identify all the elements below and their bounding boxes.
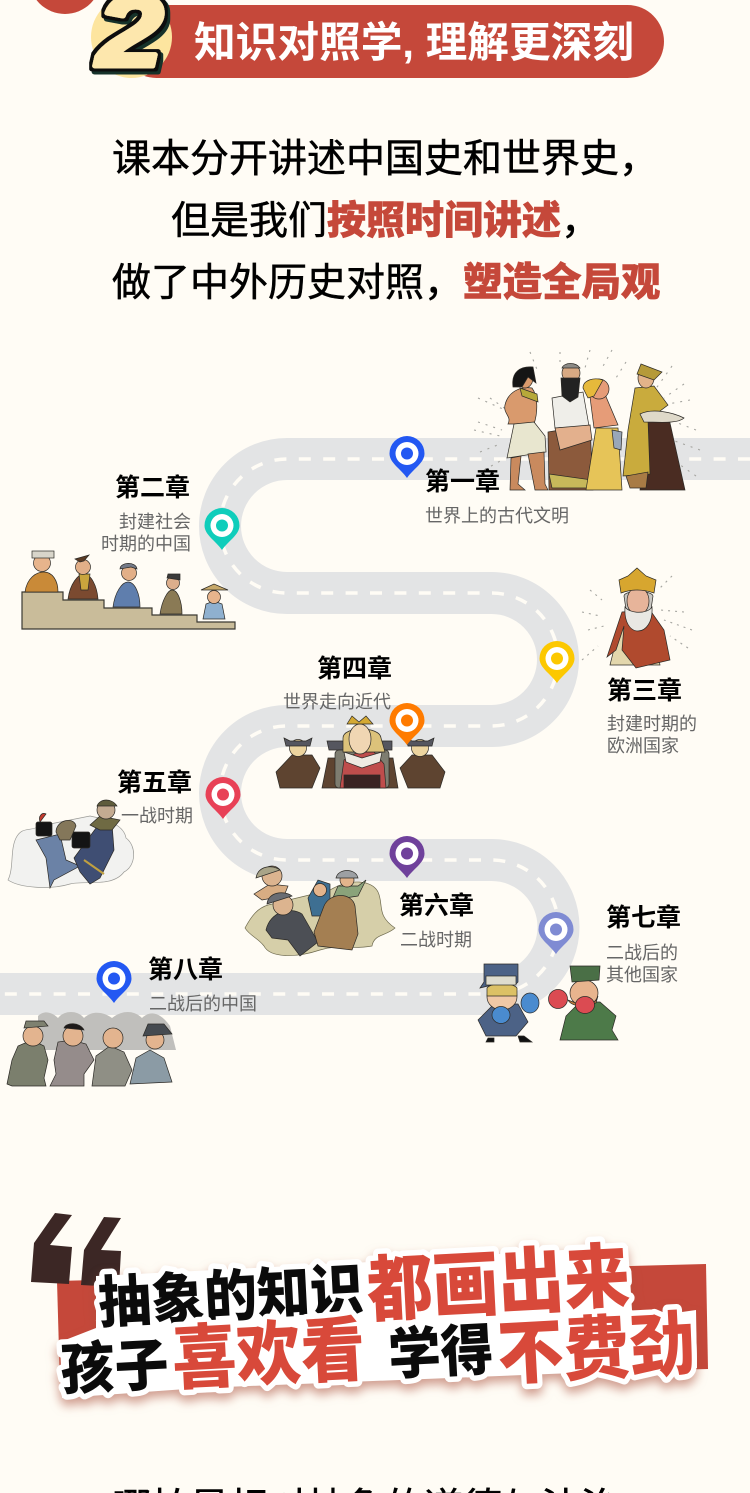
map pins (96, 436, 574, 1003)
pin chapter 5 (206, 777, 240, 819)
slogan line 1: 都画出来 (365, 1238, 632, 1332)
number badge circle (91, 0, 172, 78)
slogan line 1 (96, 1238, 632, 1346)
pin chapter 2 (204, 508, 240, 550)
chapter 2 label (101, 473, 191, 554)
official in brown (68, 555, 98, 599)
pin chapter 3 (540, 641, 574, 683)
previous section red circle (29, 0, 101, 14)
navy soldier (72, 824, 114, 884)
chapter 6 label: 二战时期 (400, 930, 472, 950)
illustration: post-war china crowd (7, 1012, 176, 1086)
brown soldier from behind (314, 896, 358, 950)
cream robe (610, 625, 660, 665)
chapter 7 label: 二战后的 (606, 943, 678, 963)
man in grey robe (130, 1024, 172, 1084)
man in taupe (50, 1024, 94, 1086)
chapter 2 label: 第二章 (115, 473, 190, 502)
chapter 6 label (399, 891, 474, 950)
chapter 7 label: 第七章 (606, 903, 681, 932)
blue soldier (308, 880, 330, 916)
chapter 6 label: 第六章 (399, 891, 474, 920)
grey officer (266, 893, 318, 956)
intro paragraph (112, 138, 661, 305)
back left soldier (322, 741, 345, 788)
uncle sam boxer (478, 964, 539, 1042)
chapter 7 label: 其他国家 (606, 965, 678, 985)
red backing panel (57, 1264, 708, 1386)
chapter 2 label: 封建社会 (119, 512, 191, 532)
chapter 3 label: 第三章 (607, 676, 682, 705)
illustration: world war two brawl (245, 866, 395, 956)
illustration: ancient civilisations group (474, 350, 700, 490)
grey crowd behind (38, 1012, 176, 1050)
scholar in blue (113, 563, 140, 607)
slogan line 2: 喜欢看 (170, 1311, 367, 1399)
chapter 5 label (117, 768, 193, 826)
illustration: cold war boxers (478, 964, 618, 1042)
pin chapter 7 (538, 912, 574, 954)
intro line 3: 做了中外历史对照，塑造全局观 (112, 261, 661, 305)
chapter 8 label: 二战后的中国 (149, 994, 257, 1014)
face and hair (624, 592, 653, 616)
title pill (120, 5, 664, 78)
road surface (0, 459, 750, 994)
chapter 4 label (283, 654, 392, 712)
burst marks (582, 576, 692, 660)
stairs (22, 592, 235, 629)
chapter 4 label: 世界走向近代 (283, 692, 391, 712)
soviet boxer (548, 966, 618, 1040)
olive soldier (90, 800, 120, 830)
slogan line 2 (58, 1294, 697, 1417)
chapter 7 label (606, 903, 681, 985)
section title: 知识对照学, 理解更深刻 (194, 19, 634, 66)
chapter 3 label (607, 676, 697, 756)
pin chapter 6 (390, 836, 424, 878)
pin chapter 1 (390, 436, 424, 478)
chapter 3 label: 欧洲国家 (607, 736, 679, 756)
chapter 1 label: 第一章 (425, 467, 500, 496)
robed figure in yellow (623, 364, 685, 490)
pin chapter 8 (96, 961, 132, 1003)
left soldier (276, 738, 320, 788)
chapter 2 label: 时期的中国 (101, 534, 191, 554)
bald man (92, 1028, 132, 1086)
egyptian figure (505, 367, 548, 490)
chapter 1 label (425, 467, 569, 526)
red cape (607, 610, 670, 668)
chapter 5 label: 第五章 (117, 768, 192, 797)
slogan line 2: 孩子 (59, 1333, 170, 1402)
slogan banner (31, 1213, 708, 1417)
back right soldier (378, 741, 398, 788)
illustration: medieval european king (582, 568, 692, 668)
section header (29, 0, 664, 88)
white dust cloud (8, 816, 134, 887)
chapter labels (101, 467, 697, 1014)
ushanka soldier (332, 870, 366, 900)
bearded figure (548, 364, 593, 490)
chapter 1 label: 世界上的古代文明 (425, 506, 569, 526)
chapter 4 label: 第四章 (317, 654, 392, 683)
emperor (25, 551, 58, 592)
illustration: world war one scuffle (8, 800, 134, 888)
white fill behind slogan (60, 1246, 697, 1398)
burst marks (474, 350, 700, 476)
chapter 8 label: 第八章 (148, 955, 223, 984)
slogan text on white outline (58, 1238, 697, 1417)
crown (619, 568, 656, 593)
winding road timeline (0, 459, 750, 994)
road centre dashes (0, 459, 750, 994)
chapter 8 label (148, 955, 257, 1014)
farmer in olive (160, 574, 182, 614)
blue soldier (36, 813, 80, 888)
slogan line 2: 不费劲 (495, 1306, 697, 1394)
throne and seated king (335, 716, 389, 788)
intro line 1: 课本分开讲述中国史和世界史， (112, 138, 658, 181)
slogan line 2: 学得 (387, 1318, 495, 1386)
illustration: feudal china stair hierarchy (22, 551, 235, 629)
opening quote mark (31, 1213, 121, 1287)
intro line 2: 但是我们按照时间讲述， (171, 200, 600, 243)
woman in beige (56, 820, 76, 840)
illustration: modern era king and soldiers (276, 716, 445, 788)
chapter 5 label: 一战时期 (121, 806, 193, 826)
slogan line 1: 抽象的知识 (97, 1258, 365, 1335)
turbaned figure (583, 379, 622, 490)
right soldier (400, 738, 445, 788)
olive man (7, 1021, 48, 1086)
dust cloud (245, 882, 395, 956)
skin-toned soldier (254, 866, 288, 900)
white beard (625, 607, 652, 631)
pin chapter 4 (390, 703, 424, 745)
chapter 3 label: 封建时期的 (607, 714, 697, 734)
peasant in straw hat (201, 584, 228, 619)
